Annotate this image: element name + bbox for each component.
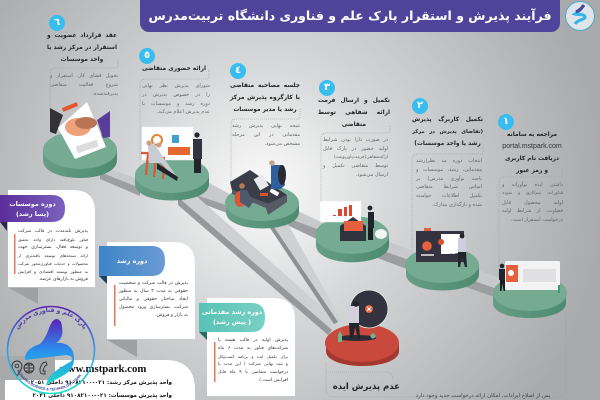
- ribbon title growth: دوره رشد: [117, 257, 147, 265]
- card text institutes: فناور بلوغ‌یافته دارای واحد تحقیق: [18, 237, 88, 242]
- step number 4: [230, 63, 246, 79]
- step number 4: ٤: [235, 65, 241, 76]
- body step 2: شده و بارگذاری مدارک.: [432, 202, 482, 208]
- body step 3: توسط متقاضی تکمیل و: [323, 163, 388, 169]
- card text growth: به بازار و فروش.: [155, 313, 188, 318]
- heading step 6: استقرار در مرکز رشد یا: [47, 45, 117, 51]
- ribbon title pre-incubation: دوره رشد مقدماتی: [202, 308, 262, 316]
- body step 3: ارائه‌شفاهی(فرمت‌پاورپوینت): [334, 155, 388, 160]
- step number 3: [319, 80, 335, 96]
- body step 2: مقدماتی، رشد، موسسات و: [416, 167, 482, 173]
- watermark logo: science and technology park: MODARES SCIENCE & TECHNOLOGY PARK: [17, 370, 82, 390]
- heading step 1: [502, 132, 562, 174]
- body step 5: دوره رشد و موسسات یا: [142, 101, 210, 107]
- body step 2: [416, 158, 482, 208]
- watermark logo: science and technology park: پارک علم و فناوری مدرس: [17, 308, 86, 330]
- step number 6: [49, 15, 65, 31]
- heading step 5: ارائه حضوری متقاضی: [142, 66, 206, 72]
- body step 6: [50, 73, 118, 97]
- body step 6: شروع فعالیت متقاضی: [50, 82, 118, 88]
- disc step 2: [405, 247, 479, 290]
- card text growth: ایجاد ساختار حقوقی و مالیاتی: [119, 297, 188, 302]
- card text growth: حقوقی به مدت ۳ سال به منظور: [119, 289, 188, 294]
- note under rejected idea: پس از اصلاح ایرادات، امکان ارائه درخواست جدید وجود دارد: [416, 393, 550, 399]
- body step 4: مشخص می‌شود.: [264, 141, 300, 147]
- body step 3: در صورت دارا بودن شرایط: [323, 137, 388, 143]
- body step 1: اولیه محصول قابل: [502, 200, 563, 206]
- contact phone lines: [30, 380, 172, 399]
- disc step 4: [225, 185, 299, 228]
- card text growth: پذیرش در قالب شرکت و شخصیت: [119, 281, 188, 286]
- heading step 3: تکمیل و ارسال فرمت: [318, 98, 390, 104]
- heading step 6: عقد قرارداد عضویت و: [47, 33, 117, 39]
- card text pre-incubation: پذیرش اولیه در قالب هسته یا: [218, 338, 288, 343]
- step number 2: [412, 98, 428, 114]
- disc rejected idea: [325, 324, 399, 366]
- heading step 2: [412, 116, 483, 147]
- heading step 1: و رمز عبور: [516, 168, 548, 174]
- body step 3: [322, 137, 388, 178]
- body step 5: عدم پذیرش اعلام می‌کند.: [157, 109, 210, 115]
- contact website: www.mstpark.com: [60, 363, 146, 375]
- illustration: presentation to the board: [141, 127, 202, 181]
- step number 1: [498, 114, 514, 130]
- illustration: portal registration: [499, 261, 560, 293]
- illustration: submission with chart and envelope: [320, 201, 387, 241]
- step number 5: [139, 48, 155, 64]
- card text pre-incubation: درخواست متقاضی تا ۹ ماه قابل: [218, 370, 288, 375]
- heading step 4: با کارگروه پذیرش مرکز: [230, 95, 300, 101]
- card text growth: [118, 280, 188, 318]
- body step 1: قضاوت، از شرایط اولیه: [502, 208, 563, 214]
- heading step 1: مراجعه به سامانه: [507, 132, 557, 138]
- step number 5: ٥: [144, 50, 150, 61]
- dotted process guides: [50, 59, 566, 397]
- card text growth: شرکت، بسترسازی ورود محصول: [119, 305, 188, 310]
- body step 6: تحویل فضای کار، استقرار و: [50, 73, 118, 79]
- disc step 5: [135, 157, 209, 200]
- body step 3: اولیه حضور در پارک فایل: [323, 146, 388, 152]
- card text institutes: ارائه نسخه‌های توسعه یافته‌تری از: [18, 253, 88, 258]
- step number 3: ٣: [324, 82, 330, 93]
- panel: card fold shadows: [9, 288, 137, 357]
- body step 2: تکمیل اطلاعات خواسته: [416, 193, 482, 199]
- card text institutes: و توسعه فعال، بسترسازی جهت: [18, 245, 88, 250]
- step number 2: ٢: [417, 100, 423, 111]
- ribbon title institutes: (پسا رشد): [16, 210, 49, 218]
- heading step 3: ارائه شفاهی توسط: [318, 110, 390, 116]
- body step 4: نتیجه نهایی پذیرش رشد: [232, 123, 300, 129]
- panel: contact strip: [0, 356, 55, 382]
- illustration: interview at desk: [230, 160, 287, 215]
- body step 3: ارسال می‌شود.: [356, 172, 388, 178]
- step number 6: ٦: [54, 17, 60, 28]
- card text institutes: محصولات و خدمات فناوری‌محور شرکت: [18, 261, 88, 266]
- heading step 6: [46, 32, 117, 63]
- body step 5: را در خصوص پذیرش در: [142, 92, 210, 98]
- illustration: application form book: [416, 228, 467, 267]
- ribbon title pre-incubation: ( پیش رشد): [213, 318, 251, 326]
- panel: pre-incubation card: [199, 298, 295, 396]
- ribbon title institutes: [9, 200, 56, 218]
- card text institutes: [18, 228, 88, 282]
- heading step 3: متقاضی: [342, 122, 366, 128]
- heading step 4: [230, 82, 300, 113]
- heading step 6: واحد موسسات: [61, 57, 103, 63]
- heading step 4: رشد یا مدیر موسسات: [233, 107, 297, 113]
- contact phone lines: واحد پذیرش موسسات: ۰۲۱-۹۱۰۸۲۱۰۰ داخلی ۲۰۴۱: [32, 393, 172, 399]
- heading step 4: جلسه مصاحبه متقاضی: [230, 83, 300, 89]
- card text pre-incubation: شرکت‌های فناور به مدت ۶ ماه: [218, 346, 288, 351]
- body step 2: انتخاب دوره مد نظر(رشد: [416, 158, 482, 164]
- card text pre-incubation: [218, 338, 288, 383]
- contact phone lines: واحد پذیرش مرکز رشد: ۰۲۱-۹۱۰۸۲۱۰۰ داخلی ۲۰۵۱: [31, 380, 172, 386]
- body step 5: شورای پذیرش نظر نهایی: [142, 83, 210, 89]
- illustration: rejected idea: [338, 290, 388, 342]
- panel: contact card: [5, 360, 195, 400]
- heading step 3: [318, 98, 390, 128]
- heading step 2: رشد یا واحد موسسات): [414, 141, 481, 147]
- card text pre-incubation: و ثبت نهایی شرکت ( این مدت با: [218, 362, 288, 367]
- ribbon title pre-incubation: [202, 308, 262, 326]
- body step 4: [232, 123, 300, 147]
- heading step 1: portal.mstpark.com: [502, 143, 562, 150]
- disc step 3: [315, 216, 389, 262]
- heading step 2: (تقاضای پذیرش در مرکز: [412, 129, 483, 135]
- body step 1: [502, 181, 563, 223]
- panel: growth card: [99, 242, 195, 339]
- heading step 1: دریافت نام کاربری: [505, 156, 559, 162]
- panel: incubation card institutes: [0, 190, 95, 287]
- body step 2: اساس شرایط متقاضی: [416, 184, 482, 190]
- ribbon title institutes: دوره موسسات: [9, 200, 56, 208]
- body step 5: [142, 83, 210, 115]
- card text institutes: به منظور توسعه اقتصادی و افزایش: [18, 269, 88, 274]
- title: فرآیند پذیرش و استقرار پارک علم و فناوری دانشگاه تربیت‌مدرس: [148, 8, 552, 23]
- body step 6: پذیرفته‌شده.: [92, 91, 118, 97]
- card text pre-incubation: برای تکمیل ایده و برنامه کسب‌وکار: [218, 354, 288, 359]
- body step 1: داشتن ایده نوآورانه و: [502, 182, 563, 188]
- connector beams: [100, 165, 500, 335]
- body step 1: فناورانه، نیم‌کاری و نمونه: [502, 191, 563, 196]
- disc step 1: [493, 275, 567, 318]
- logo: park emblem top right: [565, 1, 595, 31]
- card text institutes: پذیرش بلندمدت در قالب شرکت: [18, 229, 88, 234]
- body step 1: درخواست استقرار است.: [511, 217, 563, 223]
- heading rejected idea: عدم پذیرش ایده: [333, 382, 400, 392]
- body step 2: ناحیه نوآوری مدرس) بر: [416, 176, 482, 182]
- step number 1: ١: [503, 116, 509, 127]
- icons: location, web, phone: [12, 360, 48, 376]
- body step 4: مقدماتی در این مرحله: [232, 132, 300, 138]
- illustration: contract and handshake: [50, 102, 110, 159]
- card text institutes: فروش به بازارهای عرضه.: [38, 277, 88, 282]
- heading step 2: تکمیل کاربرگ پذیرش: [412, 117, 483, 123]
- disc step 6: [43, 131, 117, 178]
- title bar: [140, 0, 560, 32]
- card text pre-incubation: افزایش است.): [259, 378, 288, 383]
